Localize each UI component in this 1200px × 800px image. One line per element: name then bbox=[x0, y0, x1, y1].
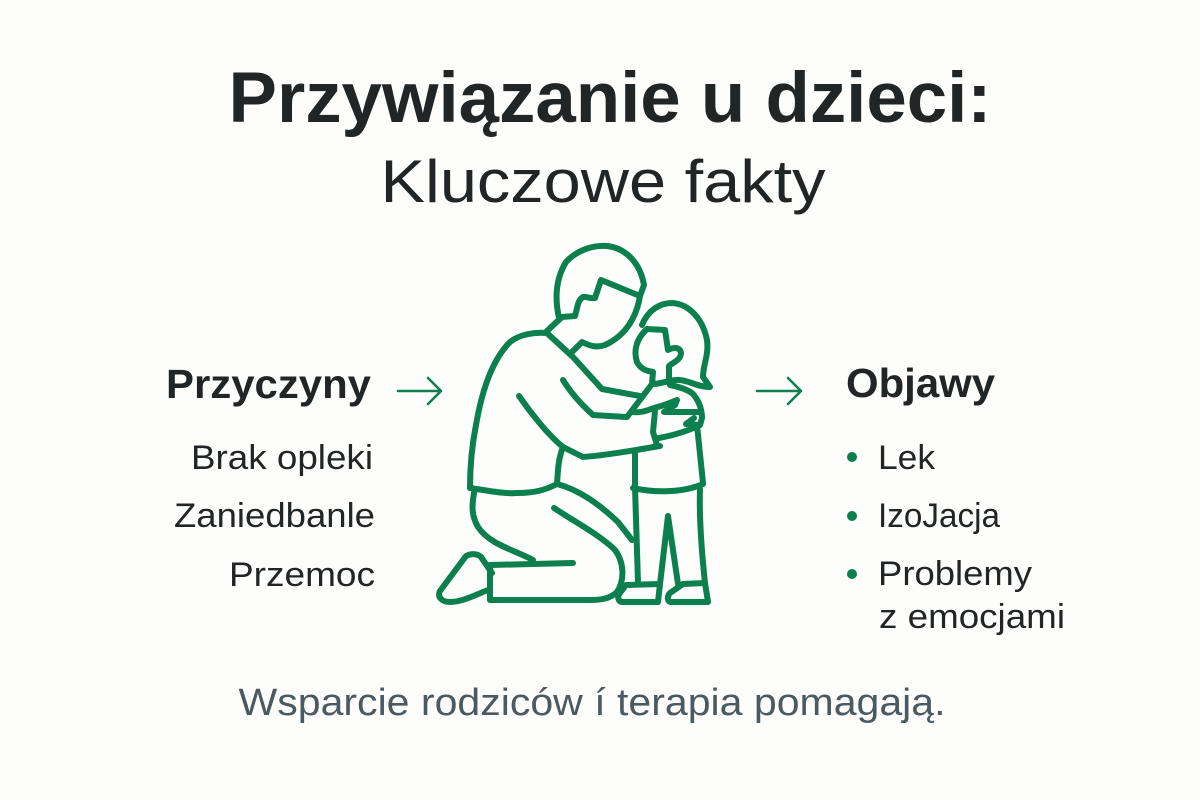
title: Przywiązanie u dzieci: bbox=[228, 59, 992, 138]
list: causes bbox=[174, 439, 375, 594]
list: symptoms: IzoJacja bbox=[878, 497, 1000, 535]
illustration: adult hugging child bbox=[439, 246, 710, 602]
list: symptoms: z emocjami bbox=[879, 598, 1065, 636]
list: causes: Brak opleki bbox=[191, 439, 373, 477]
child feet bbox=[618, 583, 708, 602]
adult legs bbox=[439, 447, 632, 602]
list: symptoms: Lek bbox=[878, 439, 936, 477]
footer message: Wsparcie rodziców í terapia pomagają. bbox=[238, 682, 946, 724]
subtitle: Kluczowe fakty bbox=[380, 148, 826, 215]
title bbox=[228, 59, 992, 215]
child head bbox=[627, 303, 710, 417]
list: symptoms: Problemy bbox=[878, 555, 1032, 593]
arrow: illustration to symptoms bbox=[757, 378, 801, 404]
list: causes: Przemoc bbox=[229, 556, 375, 594]
child body and hands bbox=[633, 385, 705, 584]
arrow: causes to illustration bbox=[398, 378, 441, 404]
adult head bbox=[547, 246, 644, 352]
adult torso and arms bbox=[470, 333, 660, 488]
heading: symptoms: Objawy bbox=[846, 360, 995, 406]
panel: causes bbox=[166, 361, 375, 594]
list: symptoms bbox=[847, 439, 1065, 636]
list: causes: Zaniedbanle bbox=[174, 497, 375, 535]
panel: symptoms bbox=[846, 360, 1065, 636]
heading: causes: Przyczyny bbox=[166, 361, 371, 407]
